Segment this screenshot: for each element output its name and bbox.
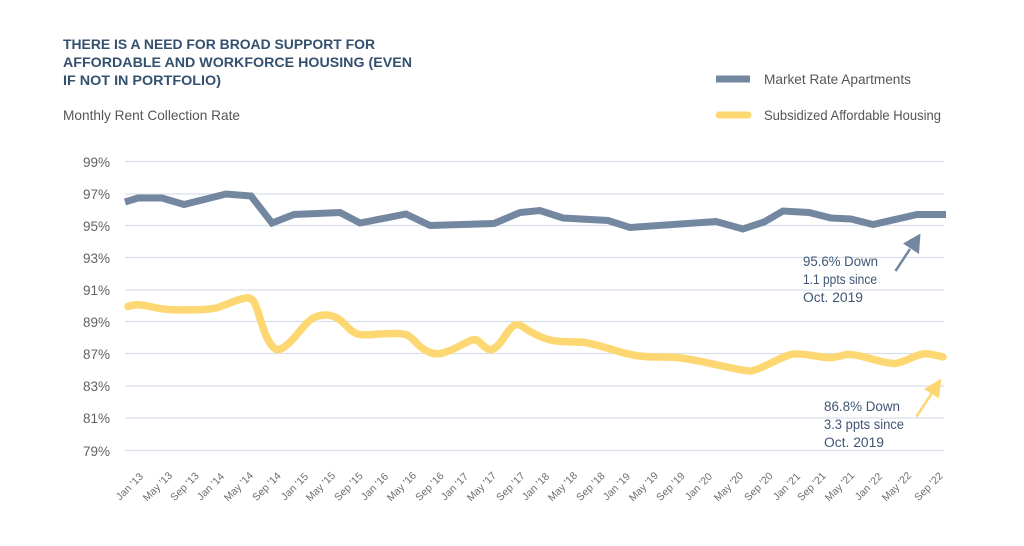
annotation text: subsidized affordable: Oct. 2019 (824, 435, 884, 450)
y axis labels: 93% (83, 251, 110, 266)
x axis labels (114, 470, 946, 504)
callout: market rate (803, 234, 920, 305)
x axis labels: May '14 (222, 470, 256, 504)
x axis labels: Sep '19 (654, 470, 688, 504)
annotation text: subsidized affordable: 86.8% Down (824, 399, 900, 414)
x axis labels: Sep '22 (912, 470, 946, 504)
x axis labels: Jan '17 (439, 471, 471, 503)
x axis labels: Sep '14 (250, 470, 284, 504)
x axis labels: May '20 (712, 470, 746, 504)
title: IF NOT IN PORTFOLIO) (63, 73, 221, 88)
x axis labels: Sep '17 (494, 470, 528, 504)
y axis labels: 91% (83, 283, 110, 298)
x axis labels: Jan '20 (683, 471, 715, 503)
arrow: subsidized affordable (916, 378, 942, 416)
annotation text: market rate (803, 254, 878, 305)
x axis labels: May '13 (141, 470, 175, 504)
x axis labels: May '16 (385, 470, 419, 504)
callout: subsidized affordable (824, 378, 942, 450)
line: market rate apartments (125, 194, 946, 229)
y axis labels: 87% (83, 347, 110, 362)
legend: subsidized affordable housing: Subsidized Affordable Housing (764, 107, 941, 123)
line chart (83, 155, 946, 504)
y axis labels: 97% (83, 187, 110, 202)
x axis labels: Sep '16 (413, 470, 447, 504)
y axis labels: 99% (83, 155, 110, 170)
x axis labels: Jan '18 (520, 471, 552, 503)
y axis labels: 95% (83, 219, 110, 234)
y axis labels (83, 155, 110, 459)
x axis labels: Sep '21 (795, 470, 829, 504)
x axis labels: Jan '21 (771, 471, 803, 503)
title: AFFORDABLE AND WORKFORCE HOUSING (EVEN (63, 55, 412, 70)
annotation text: subsidized affordable (824, 399, 904, 450)
x axis labels: May '21 (823, 470, 857, 504)
x axis labels: May '17 (465, 470, 499, 504)
annotation text: market rate: 1.1 ppts since (803, 272, 877, 287)
x axis labels: Jan '13 (114, 471, 146, 503)
x axis labels: Sep '20 (742, 470, 776, 504)
x axis labels: Jan '22 (853, 471, 885, 503)
x axis labels: Jan '19 (601, 471, 633, 503)
x axis labels: May '19 (627, 470, 661, 504)
line: subsidized affordable housing (128, 298, 943, 371)
annotation text: market rate: 95.6% Down (803, 254, 878, 269)
x axis labels: Jan '16 (359, 471, 391, 503)
subtitle: Monthly Rent Collection Rate (63, 107, 240, 123)
y axis labels: 89% (83, 315, 110, 330)
x axis labels: Sep '18 (574, 470, 608, 504)
legend (716, 71, 941, 123)
title: THERE IS A NEED FOR BROAD SUPPORT FOR (63, 37, 375, 52)
legend: market rate apartments: Market Rate Apartments (764, 71, 911, 87)
x axis labels: Sep '15 (332, 470, 366, 504)
x axis labels: Jan '14 (195, 471, 227, 503)
x axis labels: Jan '15 (279, 471, 311, 503)
x axis labels: Sep '13 (168, 470, 202, 504)
y axis labels: 79% (83, 444, 110, 459)
arrow: market rate (896, 234, 920, 271)
title (63, 37, 412, 88)
y axis labels: 81% (83, 411, 110, 426)
x axis labels: May '22 (880, 470, 914, 504)
annotation text: subsidized affordable: 3.3 ppts since (824, 417, 904, 432)
annotation text: market rate: Oct. 2019 (803, 290, 863, 305)
x axis labels: May '15 (304, 470, 338, 504)
y axis labels: 83% (83, 379, 110, 394)
x axis labels: May '18 (546, 470, 580, 504)
